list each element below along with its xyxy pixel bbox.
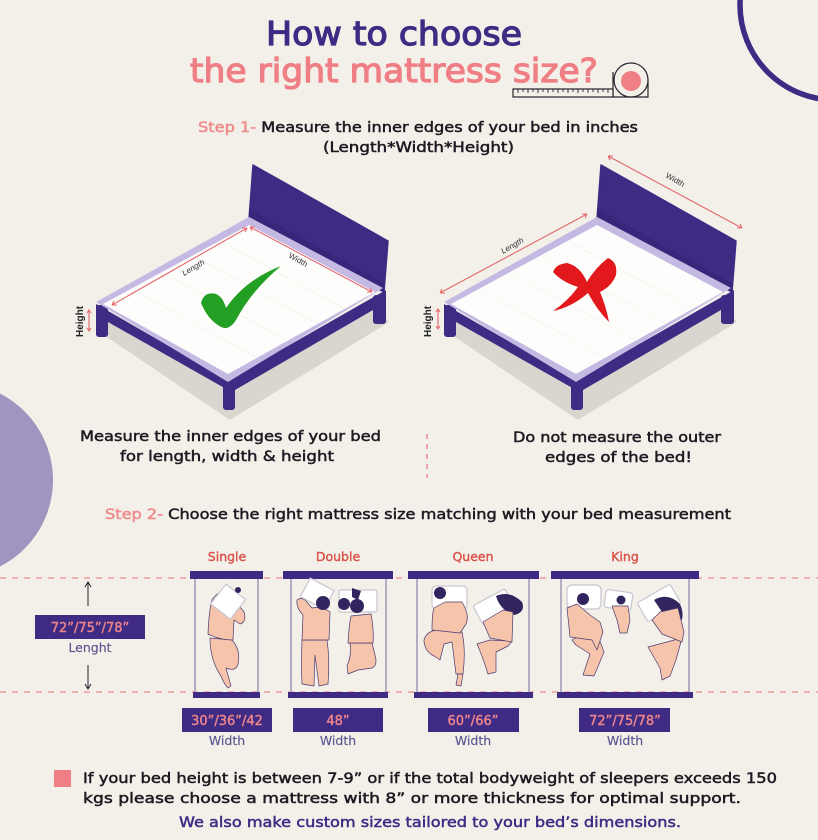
- caption: incorrect method: edges of the bed!: [545, 450, 692, 466]
- custom sizes note: We also make custom sizes tailored to your bed’s dimensions.: [179, 815, 681, 831]
- bed size: queen: Queen: [452, 549, 494, 564]
- bed size: king: King: [611, 549, 639, 564]
- sleepers: couple: [424, 586, 523, 686]
- length dimension: Lenght: [68, 640, 112, 655]
- illustration: correct inner measurement bed: Length: [180, 257, 207, 278]
- bed size: single: Width: [209, 733, 245, 748]
- length dimension: 72”/75”/78”: [51, 621, 129, 636]
- arrow: down: [85, 665, 91, 689]
- step 1 heading: [198, 120, 638, 156]
- sleepers: family: [567, 584, 684, 680]
- arrows: inner length and width: [87, 227, 372, 331]
- caption: correct method: [80, 429, 381, 465]
- bed size: queen: 60”/66”: [448, 714, 498, 729]
- caption: incorrect method: Do not measure the outer: [513, 430, 721, 446]
- icon: green check mark: [201, 266, 281, 328]
- bed size: single: Single: [208, 549, 247, 564]
- bed size: king: 72”/75/78”: [589, 714, 661, 729]
- caption: incorrect method: [513, 430, 721, 466]
- illustration: incorrect outer measurement bed: Height: [423, 305, 434, 337]
- bed size: double: Width: [320, 733, 356, 748]
- illustration: incorrect outer measurement bed: Length: [500, 235, 526, 256]
- bed size: double: 48”: [326, 714, 350, 729]
- length dimension: [35, 582, 145, 689]
- sleepers: couple: [297, 578, 377, 686]
- icon: tape measure: [513, 63, 648, 97]
- arrow: up: [85, 582, 91, 606]
- illustration: incorrect outer measurement bed: Width: [664, 171, 686, 189]
- bed size: double: Double: [316, 549, 360, 564]
- bed size: queen: [408, 549, 539, 748]
- note text: kgs please choose a mattress with 8” or more thickness for optimal support.: [83, 791, 741, 807]
- icon: red cross mark: [553, 258, 616, 322]
- bed size: queen: Width: [455, 733, 491, 748]
- bed size: king: [551, 549, 699, 748]
- step 2 heading: Step 2- Choose the right mattress size matching with your bed measurement: [105, 507, 731, 523]
- title: the right mattress size?: [190, 51, 598, 90]
- step 1 heading: Step 1- Measure the inner edges of your bed in inches: [198, 120, 638, 136]
- bed size: king: Width: [607, 733, 643, 748]
- illustration: correct inner measurement bed: [75, 165, 389, 420]
- title: [190, 14, 598, 90]
- note text: If your bed height is between 7-9” or if the total bodyweight of sleepers exceeds 150: [83, 771, 777, 787]
- step 1 heading: (Length*Width*Height): [323, 140, 514, 156]
- arrows: outer length and width: [436, 156, 742, 329]
- caption: correct method: Measure the inner edges of your bed: [80, 429, 381, 445]
- bed size: single: 30”/36”/42: [191, 714, 263, 729]
- title: How to choose: [266, 14, 522, 53]
- caption: correct method: for length, width & height: [120, 449, 334, 465]
- illustration: incorrect outer measurement bed: [423, 156, 742, 420]
- bed size: single: [182, 549, 272, 748]
- decorative arc top right: [740, 0, 818, 100]
- note text: [83, 771, 777, 807]
- bed size: double: [283, 549, 393, 748]
- decorative circle left: [0, 383, 53, 577]
- sleeper: single: [208, 584, 246, 688]
- illustration: correct inner measurement bed: Width: [287, 251, 309, 269]
- icon: note bullet: [54, 770, 71, 787]
- illustration: correct inner measurement bed: Height: [75, 305, 86, 337]
